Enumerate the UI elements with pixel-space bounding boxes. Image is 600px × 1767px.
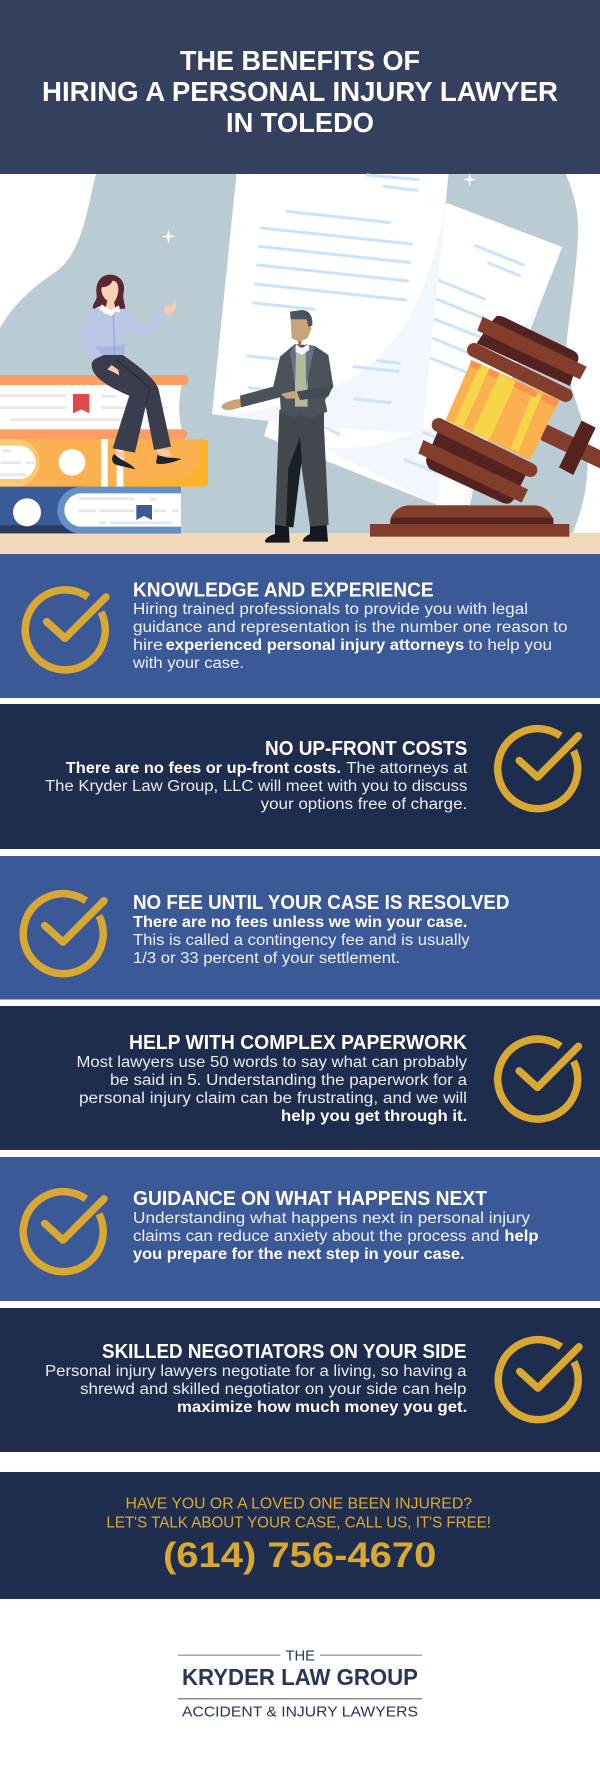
trousers xyxy=(275,403,329,527)
body text xyxy=(45,1363,467,1416)
body text: claims can reduce anxiety about the process and xyxy=(133,1228,499,1245)
collar xyxy=(99,304,120,316)
left hand xyxy=(221,399,242,410)
title: THE BENEFITS OF xyxy=(180,45,420,76)
body text: personal injury claim can be frustrating, and we will xyxy=(79,1090,467,1107)
body text: help xyxy=(504,1228,538,1245)
shirt xyxy=(295,347,308,407)
body text: maximize how much money you get. xyxy=(177,1399,467,1416)
body text xyxy=(133,1210,538,1263)
stack of books xyxy=(0,375,208,534)
body text: Hiring trained professionals to provide you with legal xyxy=(133,601,528,618)
heading: SKILLED NEGOTIATORS ON YOUR SIDE xyxy=(102,1341,466,1363)
logo: The Kryder Law Group: ACCIDENT & INJURY LAWYERS xyxy=(182,1705,418,1721)
body text: Understanding what happens next in personal injury xyxy=(133,1210,530,1227)
call to action text: LET'S TALK ABOUT YOUR CASE, CALL US, IT'S FREE! xyxy=(106,1515,491,1532)
body text: be said in 5. Understanding the paperwork for a xyxy=(110,1072,467,1089)
paper: back sheet xyxy=(264,203,562,505)
panel: no up-front costs xyxy=(0,704,600,849)
body text xyxy=(132,601,568,672)
body text: help you get through it. xyxy=(281,1108,467,1125)
face and neck xyxy=(101,281,118,309)
panel: no fee until your case is resolved xyxy=(0,856,600,1000)
raised hand xyxy=(163,301,177,316)
body text: Personal injury lawyers negotiate for a living, so having a xyxy=(45,1363,467,1380)
body text: There are no fees or up-front costs. xyxy=(66,760,341,777)
phone number: (614) 756-4670 xyxy=(163,1536,436,1575)
panel: help with complex paperwork xyxy=(0,1006,600,1150)
body text: The attorneys at xyxy=(346,760,468,777)
body text: guidance and representation is the number one reason to xyxy=(133,619,568,636)
bottom book xyxy=(0,487,181,534)
title: HIRING A PERSONAL INJURY LAWYER xyxy=(42,76,558,107)
body text xyxy=(76,1054,467,1125)
shoes xyxy=(265,525,328,543)
ankles xyxy=(115,449,172,460)
icon: gold check circle xyxy=(23,1192,104,1272)
logo: The Kryder Law Group: KRYDER LAW GROUP xyxy=(182,1664,418,1690)
top book xyxy=(0,375,188,439)
body text: to help you xyxy=(468,637,552,654)
body text: with your case. xyxy=(132,655,244,672)
body text: shrewd and skilled negotiator on your side can help xyxy=(80,1381,466,1398)
body text: hire xyxy=(133,637,163,654)
body text: There are no fees unless we win your case. xyxy=(133,914,467,931)
background blob xyxy=(0,174,588,540)
heading: NO UP-FRONT COSTS xyxy=(265,738,467,760)
logo: The Kryder Law Group xyxy=(178,1648,422,1721)
floor xyxy=(0,533,600,554)
call to action banner xyxy=(0,1472,600,1599)
call to action text: HAVE YOU OR A LOVED ONE BEEN INJURED? xyxy=(126,1496,472,1513)
man in suit xyxy=(221,310,333,543)
heading: GUIDANCE ON WHAT HAPPENS NEXT xyxy=(133,1188,487,1210)
illustration: lawyer consultation scene xyxy=(0,173,600,554)
middle book xyxy=(0,439,208,487)
icon: gold check circle xyxy=(498,1039,578,1119)
body text xyxy=(45,760,468,813)
panel: knowledge and experience xyxy=(0,554,600,698)
heading: KNOWLEDGE AND EXPERIENCE xyxy=(133,580,434,602)
hand on knee xyxy=(107,365,119,375)
heading: NO FEE UNTIL YOUR CASE IS RESOLVED xyxy=(133,892,509,914)
hair xyxy=(290,310,312,327)
call to action text xyxy=(106,1496,491,1532)
gavel head xyxy=(418,316,587,504)
body text: This is called a contingency fee and is usually xyxy=(133,932,470,949)
shoes xyxy=(112,454,182,469)
sound block xyxy=(370,505,569,537)
body text: experienced personal injury attorneys xyxy=(166,637,464,654)
title: IN TOLEDO xyxy=(226,107,374,138)
logo: The Kryder Law Group: THE xyxy=(286,1648,315,1665)
jacket xyxy=(240,344,333,418)
trousers xyxy=(92,355,171,453)
handle xyxy=(541,421,600,475)
forearm and hand xyxy=(297,385,333,400)
body text: you prepare for the next step in your case. xyxy=(133,1246,465,1263)
neck beard xyxy=(297,337,303,347)
icon: gold check circle xyxy=(23,894,104,974)
heading: HELP WITH COMPLEX PAPERWORK xyxy=(129,1032,468,1054)
body text: your options free of charge. xyxy=(261,796,467,813)
blouse xyxy=(80,306,167,369)
panel: skilled negotiators on your side xyxy=(0,1308,600,1452)
hair xyxy=(93,275,125,309)
body text: The Kryder Law Group, LLC will meet with you to discuss xyxy=(45,778,468,795)
icon: gold check circle xyxy=(25,590,106,670)
title xyxy=(42,45,558,138)
body text: 1/3 or 33 percent of your settlement. xyxy=(133,950,400,967)
face xyxy=(291,319,312,342)
woman sitting on books xyxy=(80,275,182,469)
icon: gold check circle xyxy=(498,1340,579,1420)
lapels xyxy=(290,344,315,387)
header banner xyxy=(0,0,600,174)
body text xyxy=(133,914,470,967)
sparkles xyxy=(162,173,476,244)
icon: gold check circle xyxy=(498,729,578,809)
panel: guidance on what happens next xyxy=(0,1157,600,1301)
collar xyxy=(296,343,309,355)
body text: Most lawyers use 50 words to say what can probably xyxy=(76,1054,467,1071)
gavel and sound block xyxy=(370,316,600,537)
paper: front sheet xyxy=(212,174,448,433)
